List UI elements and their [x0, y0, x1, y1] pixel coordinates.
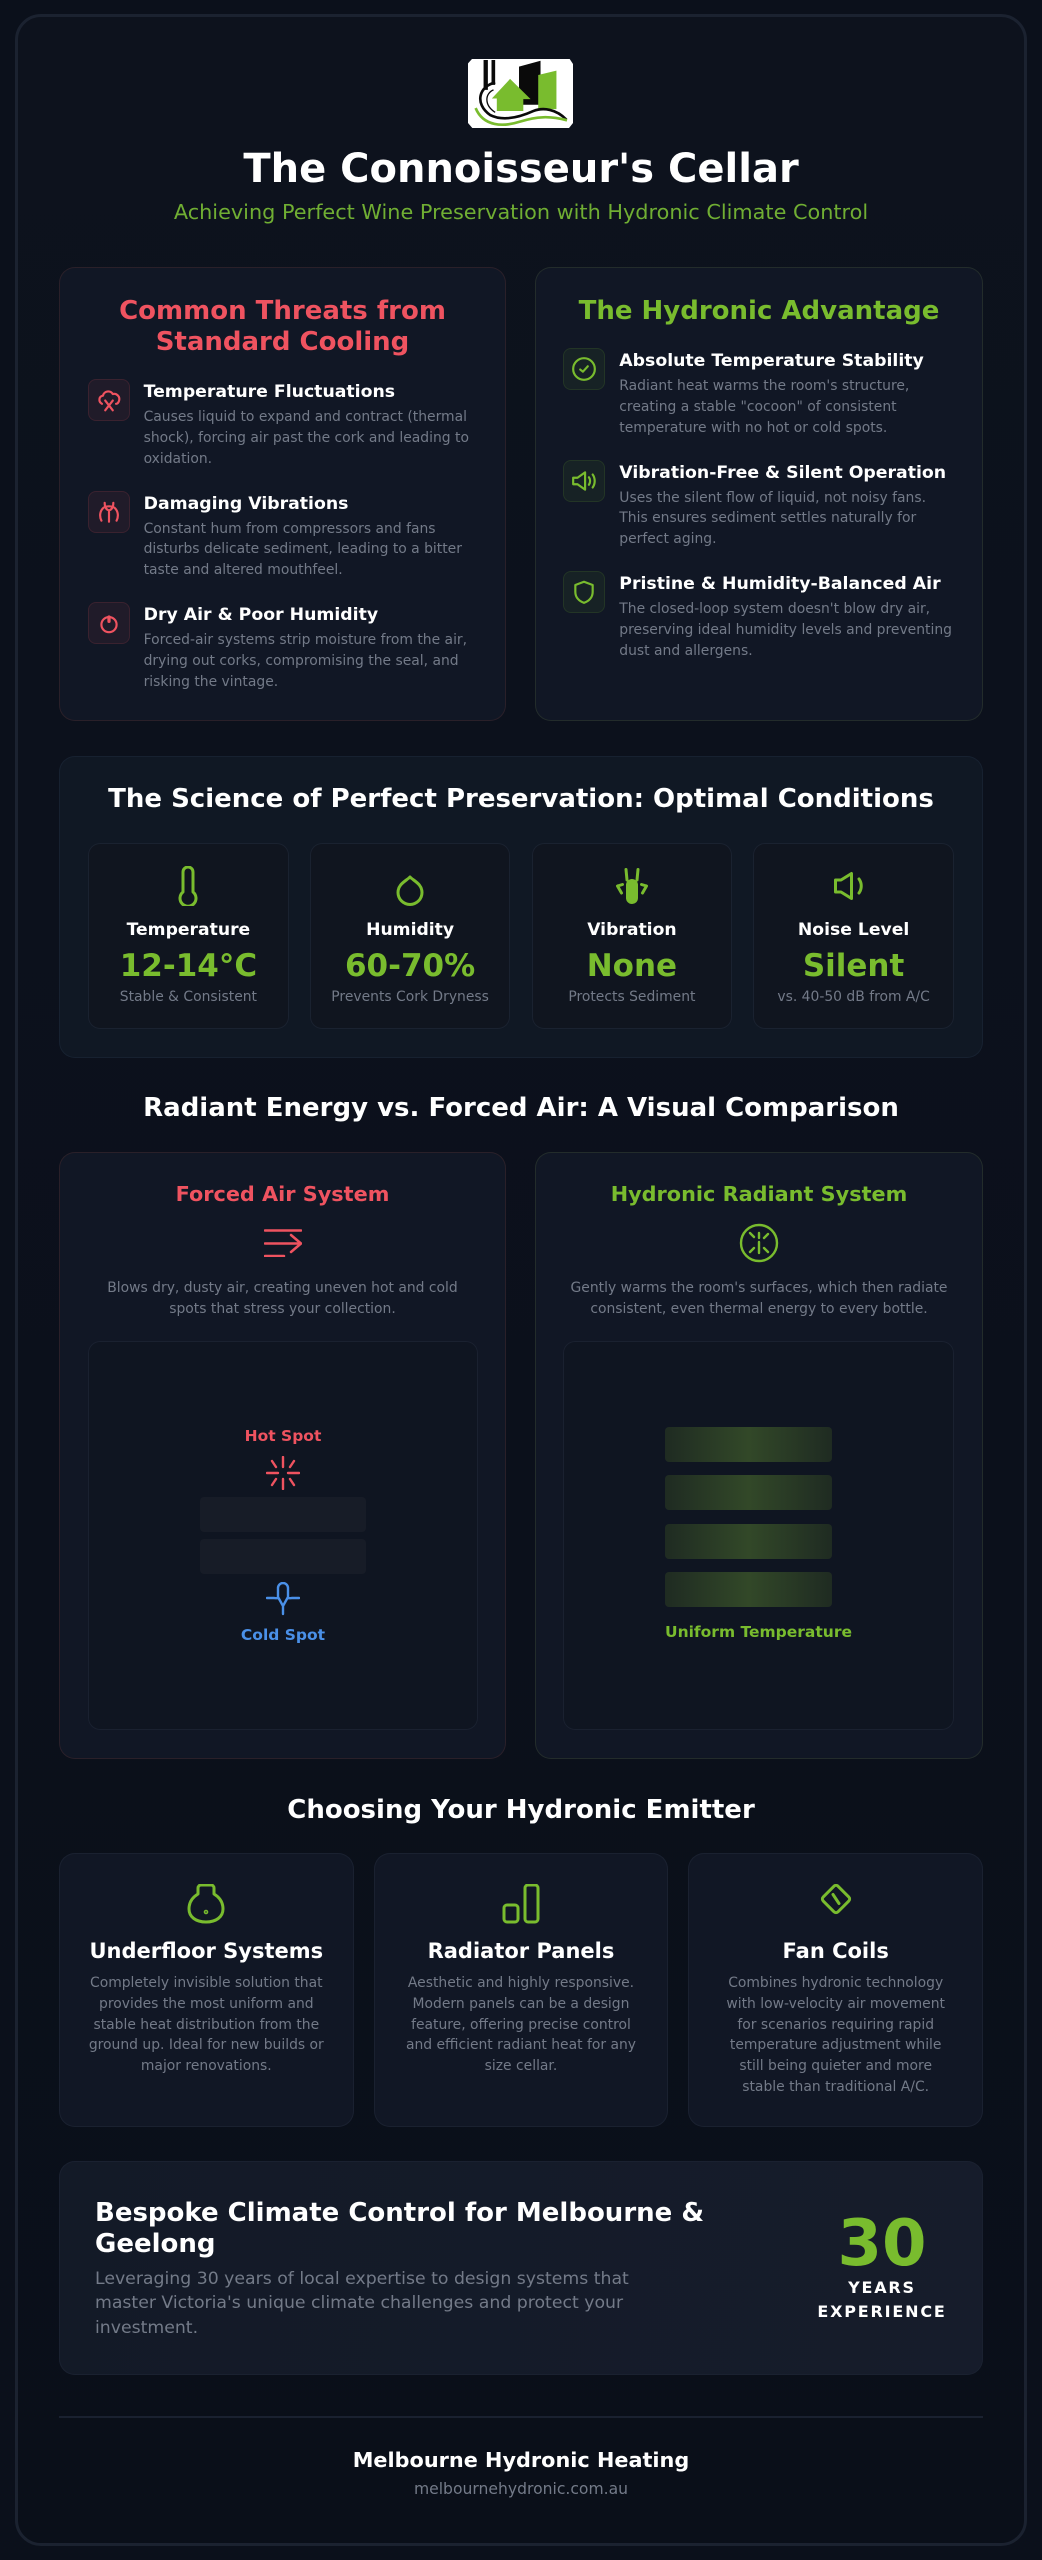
description: [406, 1975, 636, 2074]
panel: forced air system: [59, 1152, 506, 1759]
radiant band 1: [665, 1427, 832, 1462]
caption: YEARS: [848, 2278, 916, 2297]
description: Modern panels can be a design: [413, 1996, 629, 2012]
heading: Damaging Vibrations: [144, 494, 348, 514]
panel: fan coils: [688, 1853, 983, 2127]
description: shock), forcing air past the cork and leading to: [144, 430, 469, 446]
radiant band 4: [665, 1572, 832, 1607]
description: [619, 378, 909, 436]
heading: Absolute Temperature Stability: [619, 351, 924, 371]
description: temperature adjustment while: [730, 2037, 941, 2053]
heading: common threats: [119, 296, 446, 357]
heading: Geelong: [95, 2229, 216, 2259]
panel: radiator panels: [374, 1853, 668, 2127]
description: Completely invisible solution that: [90, 1975, 323, 1991]
label: Humidity: [366, 920, 454, 940]
label: cold spot: Cold Spot: [241, 1626, 325, 1644]
threat: temperature fluctuations: [88, 379, 469, 467]
description: drying out corks, compromising the seal, and: [144, 653, 459, 669]
icon: radiant circle: [740, 1224, 778, 1262]
description: Radiant heat warms the room's structure,: [619, 378, 909, 394]
caption: EXPERIENCE: [817, 2302, 947, 2321]
value: 12-14°C: [120, 948, 257, 984]
caption: [817, 2278, 947, 2321]
heading: forced air: Forced Air System: [176, 1182, 389, 1206]
description: [726, 1975, 945, 2095]
heading: Pristine & Humidity-Balanced Air: [619, 574, 941, 594]
threat: damaging vibrations: [88, 491, 462, 578]
footer: company: Melbourne Hydronic Heating: [353, 2448, 689, 2472]
description: spots that stress your collection.: [169, 1301, 396, 1317]
bottle rack 2: [200, 1539, 366, 1574]
panel: underfloor systems: [59, 1853, 354, 2127]
diagram: uneven heat: [88, 1341, 478, 1730]
value: 60-70%: [345, 948, 475, 984]
footer divider: [59, 2416, 983, 2418]
description: preserving ideal humidity levels and preventing: [619, 622, 952, 638]
description: risking the vintage.: [144, 674, 278, 690]
icon: cold spot: [266, 1582, 300, 1616]
card: noise level: [753, 843, 954, 1029]
description: feature, offering precise control: [411, 2017, 631, 2033]
description: size cellar.: [485, 2058, 557, 2074]
value: Silent: [803, 948, 904, 984]
label: uniform temperature: Uniform Temperature: [665, 1623, 852, 1641]
title: The Connoisseur's Cellar: [243, 146, 799, 192]
number: 30: [837, 2207, 927, 2281]
description: The closed-loop system doesn't blow dry air,: [619, 601, 930, 617]
description: [571, 1280, 947, 1317]
description: perfect aging.: [619, 531, 717, 547]
icon: speaker: [834, 872, 863, 900]
description: [107, 1280, 458, 1317]
description: oxidation.: [144, 451, 212, 467]
advantage: temperature stability: [563, 348, 924, 436]
description: Aesthetic and highly responsive.: [408, 1975, 634, 1991]
icon: heat burst: [266, 1456, 300, 1490]
label: Temperature: [127, 920, 250, 940]
label: Noise Level: [798, 920, 909, 940]
description: consistent, even thermal energy to every bottle.: [590, 1301, 928, 1317]
stat: 30 years: [817, 2207, 947, 2321]
description: still being quieter and more: [739, 2058, 932, 2074]
diagram: even heat: [563, 1341, 954, 1730]
heading: Vibration-Free & Silent Operation: [619, 462, 946, 482]
description: [619, 490, 926, 547]
description: Combines hydronic technology: [728, 1975, 943, 1991]
icon: radiator: [502, 1884, 540, 1924]
heading: Fan Coils: [783, 1939, 889, 1963]
description: for scenarios requiring rapid: [737, 2017, 934, 2033]
description: and efficient radiant heat for any: [406, 2037, 636, 2053]
icon: droplet: [396, 875, 424, 906]
description: dust and allergens.: [619, 643, 753, 659]
label: hot spot: Hot Spot: [245, 1427, 321, 1445]
threat: dry air: [88, 602, 467, 690]
description: stable than traditional A/C.: [742, 2079, 929, 2095]
value: None: [587, 948, 677, 984]
card: temperature: [88, 843, 289, 1029]
heading: common threats: Common Threats from: [119, 296, 446, 326]
footer: website: melbournehydronic.com.au: [414, 2480, 628, 2498]
description: Blows dry, dusty air, creating uneven hot and cold: [107, 1280, 458, 1296]
description: [144, 409, 469, 467]
panel: hydronic advantage: [535, 267, 983, 721]
description: [95, 2269, 629, 2338]
heading: optimal conditions: The Science of Perfect Preservation: Optimal Conditions: [108, 784, 934, 814]
description: Uses the silent flow of liquid, not noisy fans.: [619, 490, 926, 506]
description: provides the most uniform and: [99, 1996, 314, 2012]
icon: fan coil: [820, 1884, 852, 1914]
heading: hydronic radiant: Hydronic Radiant System: [611, 1182, 907, 1206]
description: master Victoria's unique climate challenges and protect your: [95, 2293, 623, 2313]
radiant band 3: [665, 1524, 832, 1559]
description: temperature with no hot or cold spots.: [619, 420, 887, 436]
heading: Underfloor Systems: [89, 1939, 323, 1963]
icon: dry air: [88, 602, 130, 644]
description: [144, 632, 467, 690]
logo: [468, 59, 573, 128]
description: creating a stable "cocoon" of consistent: [619, 399, 897, 415]
description: [144, 521, 462, 578]
card: humidity: [310, 843, 510, 1029]
label: Vibration: [587, 920, 677, 940]
heading: Dry Air & Poor Humidity: [144, 605, 378, 625]
subtitle: Achieving Perfect Wine Preservation with Hydronic Climate Control: [174, 200, 868, 224]
description: This ensures sediment settles naturally for: [619, 510, 916, 526]
heading: choosing emitter: Choosing Your Hydronic Emitter: [287, 1794, 755, 1824]
description: [619, 601, 952, 659]
icon: cloud with cross: [88, 379, 130, 421]
panel: optimal conditions: [59, 756, 983, 1058]
heading: Radiator Panels: [428, 1939, 614, 1963]
description: taste and altered mouthfeel.: [144, 562, 343, 578]
heading: Bespoke Climate Control for Melbourne &: [95, 2198, 704, 2228]
icon: speaker: [563, 460, 605, 502]
heading: common threats: Standard Cooling: [156, 327, 409, 357]
description: ground up. Ideal for new builds or: [89, 2037, 324, 2053]
description: Forced-air systems strip moisture from the air,: [144, 632, 467, 648]
description: with low-velocity air movement: [726, 1996, 945, 2012]
card: vibration: [532, 843, 732, 1029]
note: Stable & Consistent: [120, 989, 257, 1005]
description: Leveraging 30 years of local expertise to design systems that: [95, 2269, 629, 2289]
heading: visual comparison: Radiant Energy vs. Forced Air: A Visual Comparison: [143, 1092, 899, 1122]
description: Constant hum from compressors and fans: [144, 521, 436, 537]
heading: [95, 2198, 704, 2259]
description: stable heat distribution from the: [93, 2017, 319, 2033]
description: investment.: [95, 2318, 198, 2338]
description: Gently warms the room's surfaces, which then radiate: [571, 1280, 947, 1296]
icon: vibration: [88, 490, 130, 532]
icon: air flow arrow: [264, 1229, 302, 1257]
description: major renovations.: [141, 2058, 272, 2074]
icon: thermometer: [178, 866, 198, 906]
icon: shield: [563, 571, 605, 613]
description: disturbs delicate sediment, leading to a bitter: [144, 541, 462, 557]
radiant band 2: [665, 1475, 832, 1510]
note: Protects Sediment: [568, 989, 695, 1005]
heading: Temperature Fluctuations: [144, 382, 395, 402]
icon: vibration: [616, 868, 648, 904]
panel: common threats: [59, 267, 506, 721]
note: Prevents Cork Dryness: [331, 989, 489, 1005]
icon: underfloor: [188, 1884, 224, 1924]
advantage: pristine air: [563, 571, 952, 659]
advantage: silent operation: [563, 460, 946, 547]
description: Causes liquid to expand and contract (thermal: [144, 409, 467, 425]
panel: hydronic radiant system: [535, 1152, 983, 1759]
panel: call to action: [59, 2161, 983, 2375]
description: [89, 1975, 324, 2074]
bottle rack 1: [200, 1497, 366, 1532]
heading: hydronic advantage: The Hydronic Advantage: [579, 296, 939, 326]
icon: check circle: [563, 348, 605, 390]
note: vs. 40-50 dB from A/C: [777, 989, 930, 1005]
